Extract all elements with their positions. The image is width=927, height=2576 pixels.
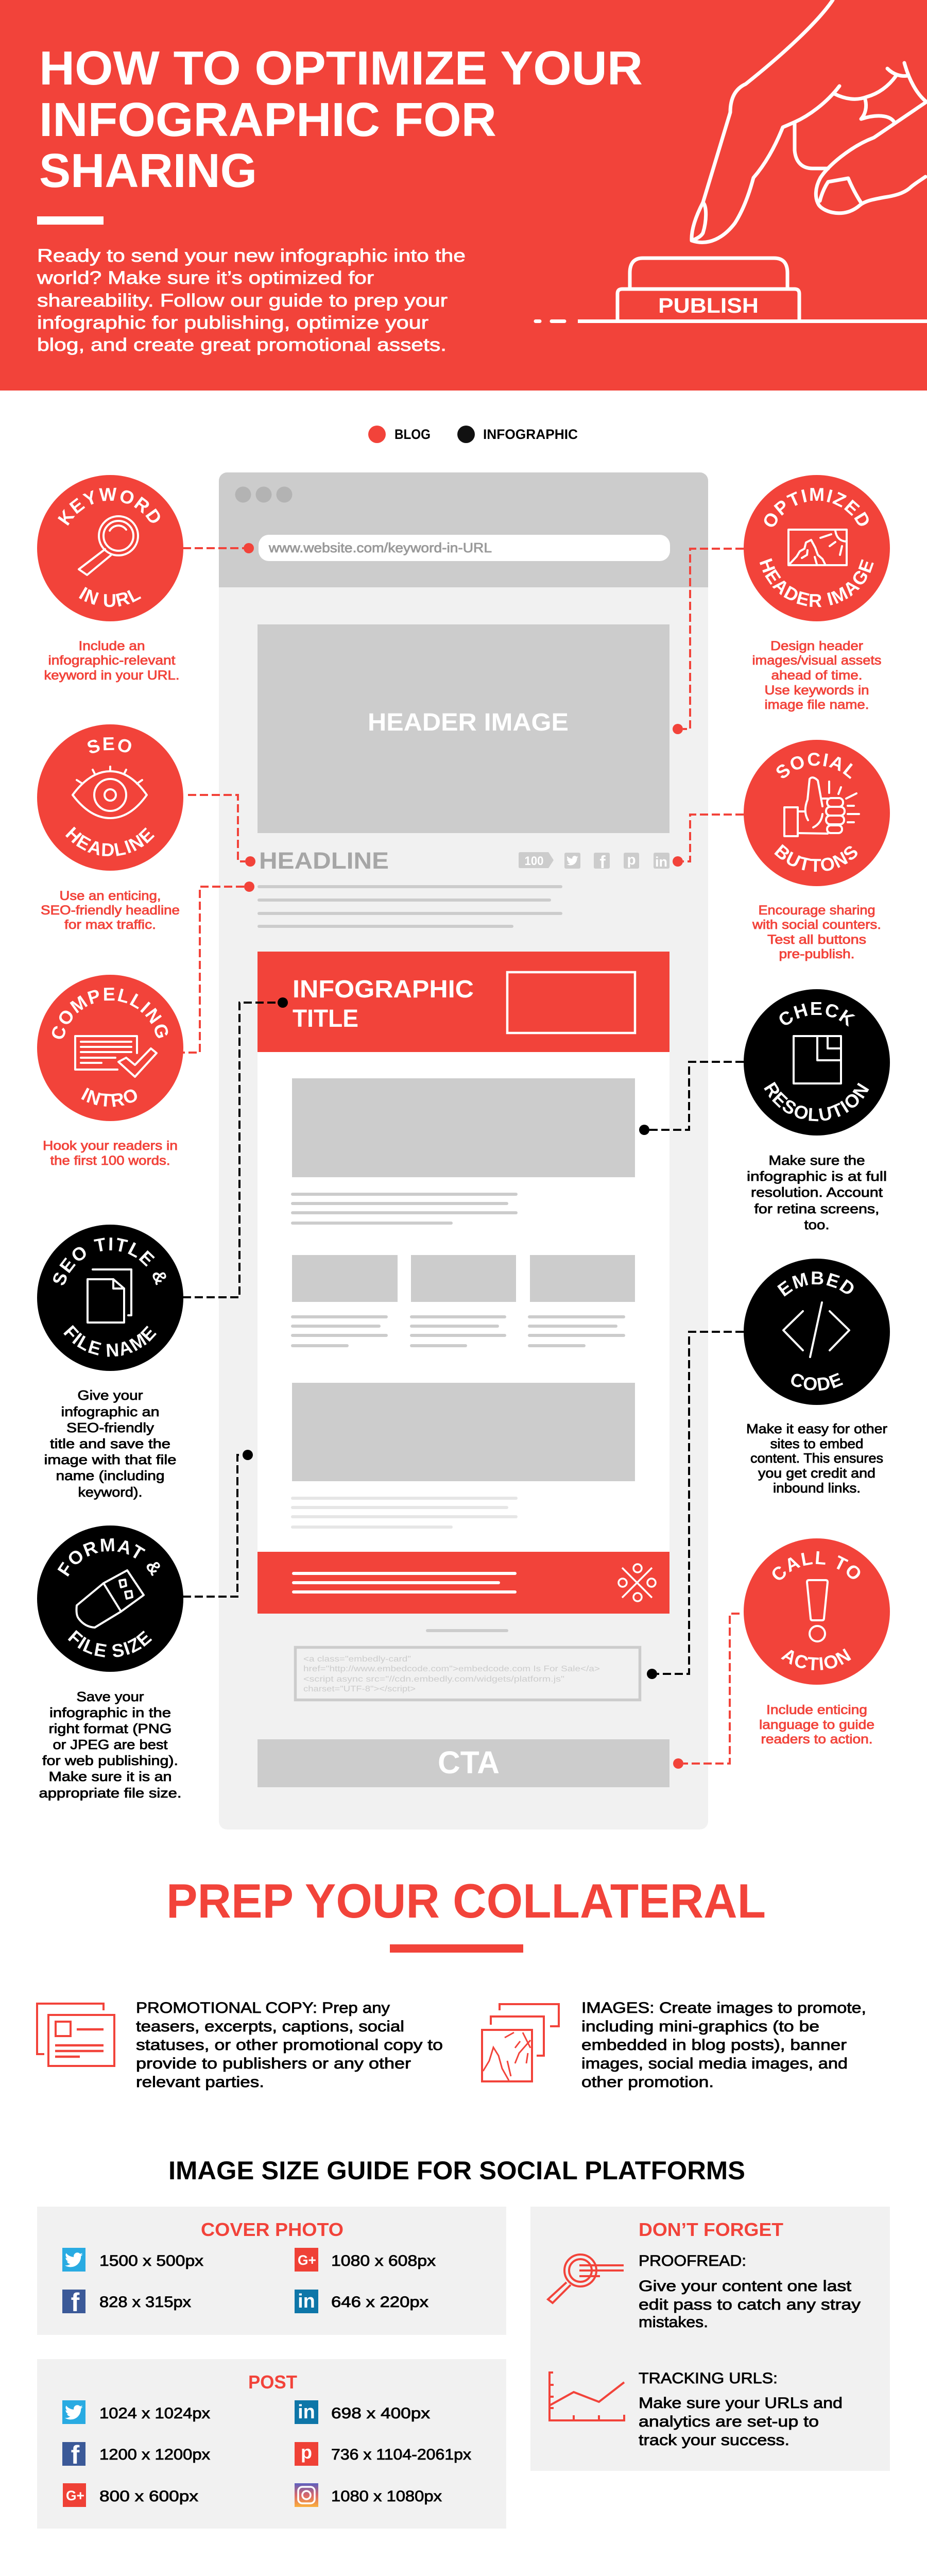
- icon: text with check: [75, 1036, 157, 1077]
- infographic title band: [258, 952, 670, 1052]
- connector: compelling intro: [183, 882, 254, 1053]
- pinterest post size: 736 x 1104-2061px: [331, 2446, 471, 2463]
- header image placeholder: [258, 624, 670, 833]
- badge: call to action: CALL TO: [772, 1551, 860, 1580]
- panel: post: POST: [248, 2371, 297, 2393]
- connector: seo headline: [188, 795, 255, 867]
- linkedin post size: in: [298, 2401, 315, 2423]
- instagram post size: 1080 x 1080px: [331, 2488, 442, 2505]
- caption: call to action: language to guide: [759, 1718, 874, 1732]
- badge: compelling intro: INTRO: [81, 1088, 137, 1107]
- badge: optimized header image: OPTIMIZED: [764, 488, 869, 527]
- linkedin size: in: [298, 2291, 315, 2312]
- badge: seo headline: HEADLINE: [65, 826, 154, 856]
- tracking text: Make sure your URLs and: [639, 2395, 843, 2412]
- google plus size: 1080 x 608px: [331, 2252, 436, 2269]
- header panel: [0, 0, 927, 391]
- panel: cover photo: [37, 2207, 506, 2335]
- heading rule: [390, 1944, 523, 1953]
- caption: seo title: keyword).: [78, 1484, 142, 1500]
- caption: check resolution: [747, 1153, 887, 1232]
- caption: keyword: infographic-relevant: [48, 653, 176, 668]
- legend: [368, 426, 578, 443]
- google plus post size: G+: [66, 2488, 84, 2503]
- text: images: IMAGES: Create images to promote,: [581, 1999, 866, 2016]
- badge: keyword in url: KEYWORD: [58, 487, 160, 526]
- text: promotional copy: [136, 1999, 443, 2091]
- caption: format: infographic in the: [49, 1705, 171, 1720]
- badge: format and file size: FILE SIZE: [68, 1630, 152, 1657]
- proofread text: PROOFREAD:: [639, 2252, 746, 2269]
- caption: optimized header: Use keywords in: [764, 683, 869, 698]
- facebook post size: 1200 x 1200px: [99, 2446, 210, 2463]
- twitter post size: 1024 x 1024px: [99, 2405, 210, 2422]
- badge: call to action: ACTION: [781, 1649, 851, 1670]
- caption: social buttons: Encourage sharing: [758, 903, 876, 918]
- embed code: <a class="embedly-card": [303, 1655, 411, 1664]
- infographic body: [258, 952, 670, 1614]
- title: SHARING: [39, 144, 257, 197]
- caption: format: or JPEG are best: [53, 1737, 168, 1752]
- panel: don't forget: DON’T FORGET: [639, 2219, 783, 2240]
- caption: compelling intro: Hook your readers in: [43, 1139, 178, 1153]
- caption: embed code: content. This ensures: [750, 1450, 883, 1466]
- caption: compelling intro: the first 100 words.: [50, 1154, 170, 1168]
- caption: call to action: Include enticing: [766, 1703, 867, 1717]
- caption: embed code: inbound links.: [773, 1480, 861, 1496]
- google plus post size: [63, 2483, 198, 2507]
- badge: seo title and file name: FILE NAME: [63, 1325, 157, 1357]
- browser dots: [235, 486, 293, 503]
- badge: check resolution: CHECK: [780, 1002, 855, 1027]
- caption: check resolution: too.: [804, 1217, 829, 1232]
- badge: embed code: EMBED: [777, 1272, 854, 1297]
- caption: format: for web publishing).: [42, 1753, 178, 1768]
- linkedin post size: [295, 2400, 430, 2424]
- panel: post: [37, 2359, 506, 2529]
- twitter post size: [62, 2400, 210, 2424]
- twitter size: [62, 2248, 203, 2272]
- caption: format: Save your: [76, 1689, 144, 1704]
- caption: keyword: Include an: [78, 639, 145, 653]
- caption: format: [39, 1689, 181, 1801]
- caption: seo headline: for max traffic.: [64, 918, 156, 932]
- text: promotional copy: teasers, excerpts, captions, social: [136, 2018, 404, 2035]
- social counter buttons: p: [627, 852, 636, 868]
- caption: seo headline: Use an enticing,: [60, 889, 161, 903]
- connector: seo title: [183, 997, 288, 1297]
- embed code: [296, 1629, 640, 1700]
- social counter buttons: 100: [524, 854, 544, 868]
- caption: embed code: Make it easy for other: [746, 1421, 887, 1436]
- infographic title band: INFOGRAPHIC: [293, 976, 474, 1003]
- facebook post size: [62, 2441, 210, 2469]
- legend: BLOG: [394, 427, 431, 442]
- social counter buttons: [519, 852, 670, 872]
- icon: nested sizes: [794, 1036, 841, 1083]
- connector: format: [183, 1450, 253, 1597]
- icon: eye: [73, 767, 147, 818]
- caption: keyword: keyword in your URL.: [44, 668, 179, 683]
- caption: seo title: name (including: [56, 1468, 165, 1483]
- faded text lines: [291, 1497, 518, 1529]
- badge: keyword in url: IN URL: [79, 587, 141, 607]
- title rule: [37, 216, 104, 225]
- footer band with logo: [258, 1552, 670, 1614]
- cta bar: [258, 1739, 670, 1787]
- caption: check resolution: Make sure the: [768, 1153, 865, 1168]
- badge: embed code: CODE: [791, 1372, 844, 1391]
- caption: call to action: [759, 1703, 874, 1747]
- cta bar: CTA: [438, 1745, 500, 1780]
- linkedin post size: 698 x 400px: [331, 2405, 430, 2422]
- icon: proofread magnifier: [548, 2255, 624, 2303]
- caption: optimized header: images/visual assets: [752, 653, 882, 668]
- text: promotional copy: statuses, or other promotional copy to: [136, 2037, 443, 2054]
- caption: format: right format (PNG: [48, 1721, 172, 1736]
- caption: social buttons: pre-publish.: [779, 947, 855, 961]
- caption: embed code: [746, 1421, 887, 1496]
- badge: seo title and file name: [37, 1225, 183, 1371]
- legend: INFOGRAPHIC: [483, 427, 578, 442]
- badge: compelling intro: COMPELLING: [52, 988, 168, 1039]
- pinterest post size: p: [301, 2442, 312, 2463]
- intro paragraph: shareability. Follow our guide to prep your: [37, 291, 448, 311]
- badge: optimized header image: [744, 475, 890, 621]
- caption: embed code: sites to embed: [770, 1436, 863, 1451]
- intro paragraph: blog, and create great promotional assets.: [37, 335, 447, 355]
- twitter size: 1500 x 500px: [99, 2252, 203, 2269]
- intro paragraph: world? Make sure it’s optimized for: [37, 268, 374, 288]
- text: images: including mini-graphics (to be: [581, 2018, 819, 2035]
- caption: seo title: Give your: [77, 1387, 143, 1403]
- caption: embed code: you get credit and: [758, 1465, 876, 1481]
- caption: call to action: readers to action.: [761, 1732, 872, 1747]
- icon: magnifier: [79, 516, 138, 575]
- icon: hand pressing: [692, 0, 926, 242]
- pinterest post size: [295, 2442, 471, 2466]
- caption: seo headline: SEO-friendly headline: [41, 903, 180, 918]
- google plus post size: 800 x 600px: [99, 2488, 198, 2505]
- proofread text: edit pass to catch any stray: [639, 2296, 861, 2313]
- icon: picture: [788, 530, 847, 565]
- google plus size: G+: [298, 2252, 316, 2268]
- text: promotional copy: provide to publishers or any other: [136, 2055, 411, 2072]
- connector: keyword in url: [183, 543, 254, 553]
- icon: images: [482, 2004, 559, 2081]
- caption: check resolution: infographic is at full: [747, 1168, 887, 1184]
- connector: embed code: [647, 1332, 744, 1679]
- badge: social buttons: SOCIAL: [777, 753, 853, 779]
- caption: seo headline: [41, 889, 180, 932]
- url bar: [259, 535, 670, 561]
- header image placeholder: HEADER IMAGE: [368, 709, 569, 736]
- badge: seo headline: [37, 724, 183, 871]
- caption: check resolution: for retina screens,: [754, 1201, 880, 1216]
- icon: thumbs up: [784, 777, 859, 836]
- title: INFOGRAPHIC FOR: [39, 93, 496, 146]
- tracking text: track your success.: [639, 2432, 789, 2449]
- icon: tracking chart: [550, 2372, 624, 2420]
- caption: seo title: SEO-friendly: [66, 1420, 154, 1435]
- facebook size: 828 x 315px: [99, 2294, 191, 2311]
- title: [39, 41, 643, 197]
- intro paragraph: Ready to send your new infographic into the: [37, 246, 466, 266]
- embed code: charset="UTF-8"></script>: [303, 1685, 416, 1693]
- connector: social buttons: [673, 815, 744, 867]
- badge: check resolution: RESOLUTION: [764, 1082, 869, 1121]
- badge: format and file size: [37, 1526, 183, 1672]
- icon: documents: [88, 1269, 131, 1323]
- icon: promotional copy: [37, 2004, 114, 2066]
- caption: optimized header: Design header: [770, 639, 863, 653]
- url bar: www.website.com/keyword-in-URL: [268, 540, 492, 555]
- social counter buttons: in: [655, 854, 667, 870]
- text: promotional copy: PROMOTIONAL COPY: Prep any: [136, 1999, 390, 2016]
- facebook post size: f: [71, 2441, 80, 2469]
- text: images: images, social media images, and: [581, 2055, 848, 2072]
- caption: format: appropriate file size.: [39, 1785, 181, 1801]
- intro text lines: [258, 885, 562, 928]
- badge: seo headline: SEO: [88, 737, 131, 753]
- proofread text: Give your content one last: [639, 2278, 852, 2295]
- caption: keyword: [44, 639, 179, 683]
- caption: seo title: image with that file: [44, 1452, 176, 1467]
- heading: prep your collateral: PREP YOUR COLLATERAL: [166, 1874, 766, 1928]
- proofread text: mistakes.: [639, 2314, 708, 2331]
- text: images: embedded in blog posts), banner: [581, 2037, 847, 2054]
- caption: social buttons: with social counters.: [752, 918, 881, 932]
- panel: don't forget: [530, 2207, 890, 2471]
- heading: image size guide: IMAGE SIZE GUIDE FOR SOCIAL PLATFORMS: [168, 2156, 745, 2185]
- content blocks: [291, 1078, 635, 1481]
- icon: usb drive: [76, 1570, 144, 1628]
- browser mockup: [219, 472, 708, 1829]
- caption: compelling intro: [43, 1139, 178, 1168]
- title: HOW TO OPTIMIZE YOUR: [39, 41, 643, 95]
- social counter buttons: f: [599, 853, 606, 872]
- facebook size: [62, 2288, 191, 2317]
- caption: social buttons: Test all buttons: [767, 933, 866, 947]
- badge: call to action: [744, 1538, 890, 1685]
- text: promotional copy: relevant parties.: [136, 2074, 264, 2091]
- connector: optimized header image: [673, 549, 744, 734]
- caption: seo title: title and save the: [50, 1436, 170, 1451]
- proofread text: [639, 2252, 861, 2331]
- infographic title band: TITLE: [293, 1005, 358, 1032]
- connector: call to action: [673, 1614, 740, 1769]
- headline placeholder: HEADLINE: [259, 848, 389, 874]
- icon: publish button: PUBLISH: [658, 294, 759, 317]
- badge: check resolution: [744, 989, 890, 1136]
- instagram post size: [295, 2483, 442, 2507]
- text: images: other promotion.: [581, 2074, 714, 2091]
- icon: exclamation: [807, 1580, 828, 1641]
- badge: embed code: [744, 1259, 890, 1405]
- connector: check resolution: [639, 1062, 744, 1135]
- badge: keyword in url: [37, 475, 183, 621]
- tracking text: [639, 2370, 843, 2449]
- tracking text: analytics are set-up to: [639, 2413, 819, 2430]
- text: images: [581, 1999, 866, 2091]
- linkedin size: 646 x 220px: [331, 2294, 428, 2311]
- panel: cover photo: COVER PHOTO: [201, 2219, 344, 2240]
- caption: optimized header: ahead of time.: [771, 668, 862, 683]
- facebook size: f: [71, 2288, 80, 2317]
- badge: social buttons: BUTTONS: [774, 844, 857, 872]
- badge: seo title and file name: SEO TITLE &: [53, 1238, 166, 1285]
- caption: check resolution: resolution. Account: [751, 1184, 883, 1200]
- tracking text: TRACKING URLS:: [639, 2370, 778, 2387]
- icon: publish button: [536, 258, 927, 321]
- badge: compelling intro: [37, 975, 183, 1121]
- caption: seo title: infographic an: [61, 1404, 160, 1419]
- caption: social buttons: [752, 903, 881, 961]
- embed code: <script async src="//cdn.embedly.com/widgets/platform.js": [303, 1675, 564, 1684]
- badge: format and file size: FORMAT &: [58, 1538, 160, 1577]
- caption: optimized header: [752, 639, 882, 712]
- linkedin size: [295, 2290, 428, 2313]
- badge: optimized header image: HEADER IMAGE: [759, 558, 874, 607]
- embed code: href="http://www.embedcode.com">embedcode.com Is For Sale</a>: [303, 1665, 600, 1673]
- intro paragraph: [37, 246, 466, 355]
- intro paragraph: infographic for publishing, optimize your: [37, 313, 428, 333]
- badge: social buttons: [744, 740, 890, 886]
- google plus size: [295, 2248, 436, 2272]
- caption: format: Make sure it is an: [48, 1769, 172, 1784]
- caption: seo title: [44, 1387, 176, 1500]
- caption: optimized header: image file name.: [764, 698, 869, 712]
- icon: code brackets: [783, 1302, 849, 1357]
